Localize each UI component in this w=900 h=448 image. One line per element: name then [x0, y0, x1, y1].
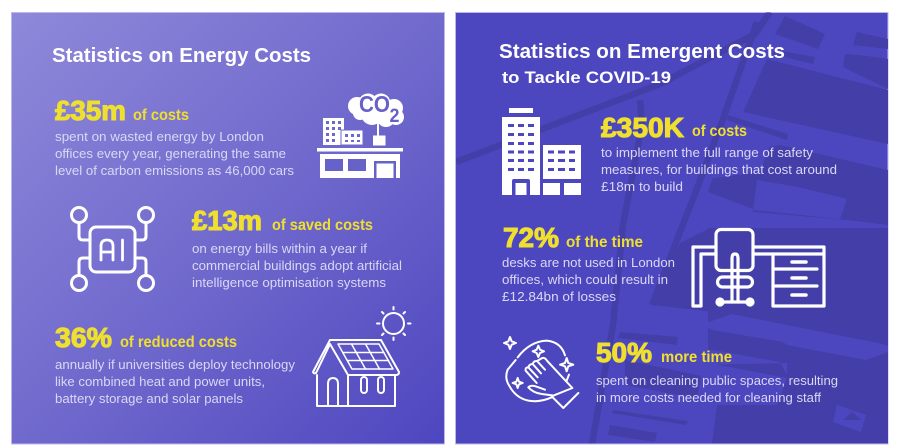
heading: energy costs: Statistics on Energy Costs: [52, 45, 311, 67]
stat: 36% of reduced costs: of reduced costs: [120, 334, 237, 351]
stat: 72% of the time: 72%: [503, 222, 559, 253]
stat: 50% more time: spent on cleaning public spaces, resulting: [596, 373, 838, 388]
stat: 72% of the time: [502, 222, 675, 304]
heading: emergent costs: [499, 41, 785, 87]
stat: 72% of the time: £12.84bn of losses: [502, 289, 617, 304]
stat: 36% of reduced costs: like combined heat and power units,: [55, 374, 265, 389]
stat: £350K of costs: measures, for buildings that cost around: [601, 162, 837, 177]
stat: £35m of costs: spent on wasted energy by London: [55, 129, 264, 144]
stat: £13m of saved costs: intelligence optimisation systems: [192, 275, 387, 290]
stat: £35m of costs: of costs: [133, 107, 189, 124]
stat: £13m of saved costs: of saved costs: [272, 217, 373, 234]
stat: £350K of costs: [601, 112, 837, 194]
stat: £35m of costs: £35m: [55, 95, 126, 126]
panel: energy costs: [12, 12, 444, 444]
stat: £13m of saved costs: commercial buildings adopt artificial: [192, 258, 402, 273]
icon: hand cleaning with sparkles: [504, 337, 578, 408]
stat: £350K of costs: £18m to build: [601, 179, 683, 194]
stat: 72% of the time: of the time: [566, 234, 643, 251]
stat: 50% more time: more time: [661, 349, 732, 366]
stat: 72% of the time: desks are not used in London: [502, 255, 675, 270]
stat: £350K of costs: of costs: [692, 123, 747, 140]
stat: £350K of costs: £350K: [601, 112, 684, 143]
stat: £13m of saved costs: £13m: [192, 205, 262, 236]
stat: 36% of reduced costs: battery storage and solar panels: [55, 391, 243, 406]
panel: emergent costs: [456, 12, 888, 444]
icon: desk and chair: [693, 230, 824, 306]
stat: £13m of saved costs: [192, 205, 402, 290]
stat: 36% of reduced costs: annually if universities deploy technology: [55, 357, 296, 372]
stat: 50% more time: [596, 337, 838, 405]
icon: house with solar panels and sun: [313, 307, 410, 406]
icon: factory with CO2 cloud: 2: [390, 106, 400, 127]
stat: 50% more time: in more costs needed for cleaning staff: [596, 390, 821, 405]
stat: 72% of the time: offices, which could result in: [502, 272, 668, 287]
icon: factory with CO2 cloud: CO: [359, 91, 390, 117]
background: street map: [456, 12, 888, 444]
icon: office buildings: [502, 108, 581, 195]
stat: 36% of reduced costs: 36%: [55, 322, 112, 353]
stat: 50% more time: 50%: [596, 337, 652, 368]
heading: emergent costs: to Tackle COVID-19: [502, 68, 671, 87]
stat: £350K of costs: to implement the full range of safety: [601, 145, 814, 160]
icon: factory with CO2 cloud: [317, 91, 404, 178]
heading: emergent costs: Statistics on Emergent Costs: [499, 41, 785, 63]
stat: £35m of costs: [55, 95, 294, 178]
stat: £35m of costs: offices every year, generating the same: [55, 146, 286, 161]
icon: AI chip: [72, 208, 154, 290]
stat: £35m of costs: level of carbon emissions as 46,000 cars: [55, 163, 294, 178]
stat: 36% of reduced costs: [55, 322, 296, 406]
stat: £13m of saved costs: on energy bills within a year if: [192, 241, 367, 256]
